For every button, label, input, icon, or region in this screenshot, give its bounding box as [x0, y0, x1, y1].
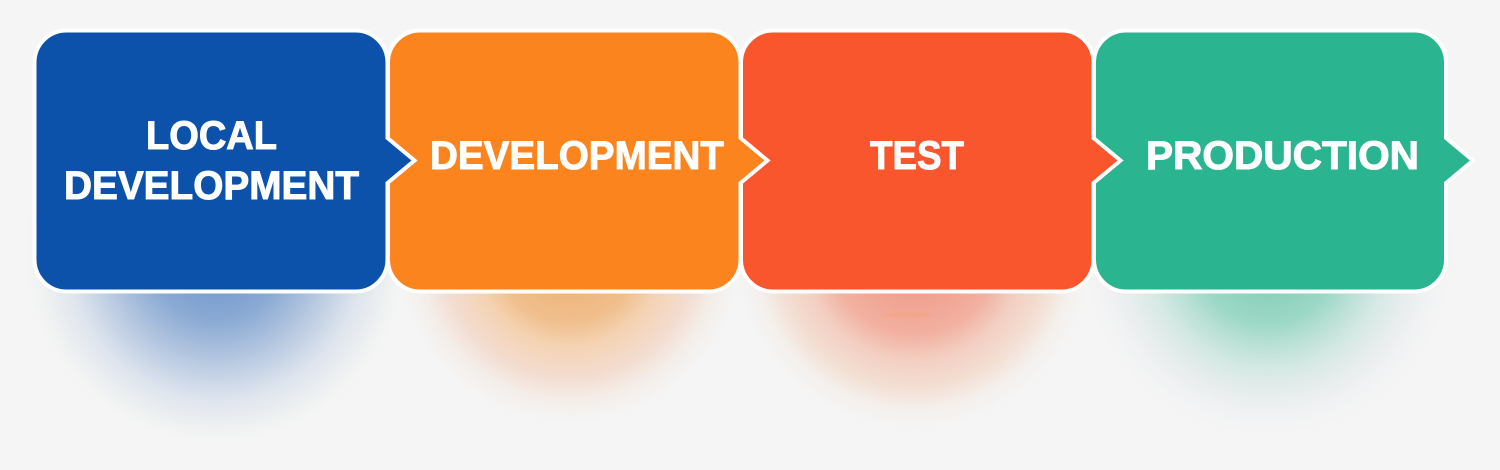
glow: local development: [26, 62, 406, 442]
panel: test: [741, 30, 1120, 292]
glow: test speckle: [883, 312, 931, 318]
panel: development: [388, 30, 768, 292]
panel: local development: [34, 30, 414, 292]
heading: test: TEST: [870, 134, 964, 178]
heading: local development: [64, 114, 359, 208]
heading: production: PRODUCTION: [1146, 134, 1419, 178]
heading: local development: LOCAL: [146, 114, 277, 158]
heading: development: DEVELOPMENT: [430, 134, 724, 178]
panel: production: [1094, 30, 1473, 292]
glow: production: [1083, 65, 1453, 435]
heading: local development: DEVELOPMENT: [64, 164, 359, 208]
glow: development: [397, 78, 741, 422]
glow: test: [736, 72, 1092, 428]
